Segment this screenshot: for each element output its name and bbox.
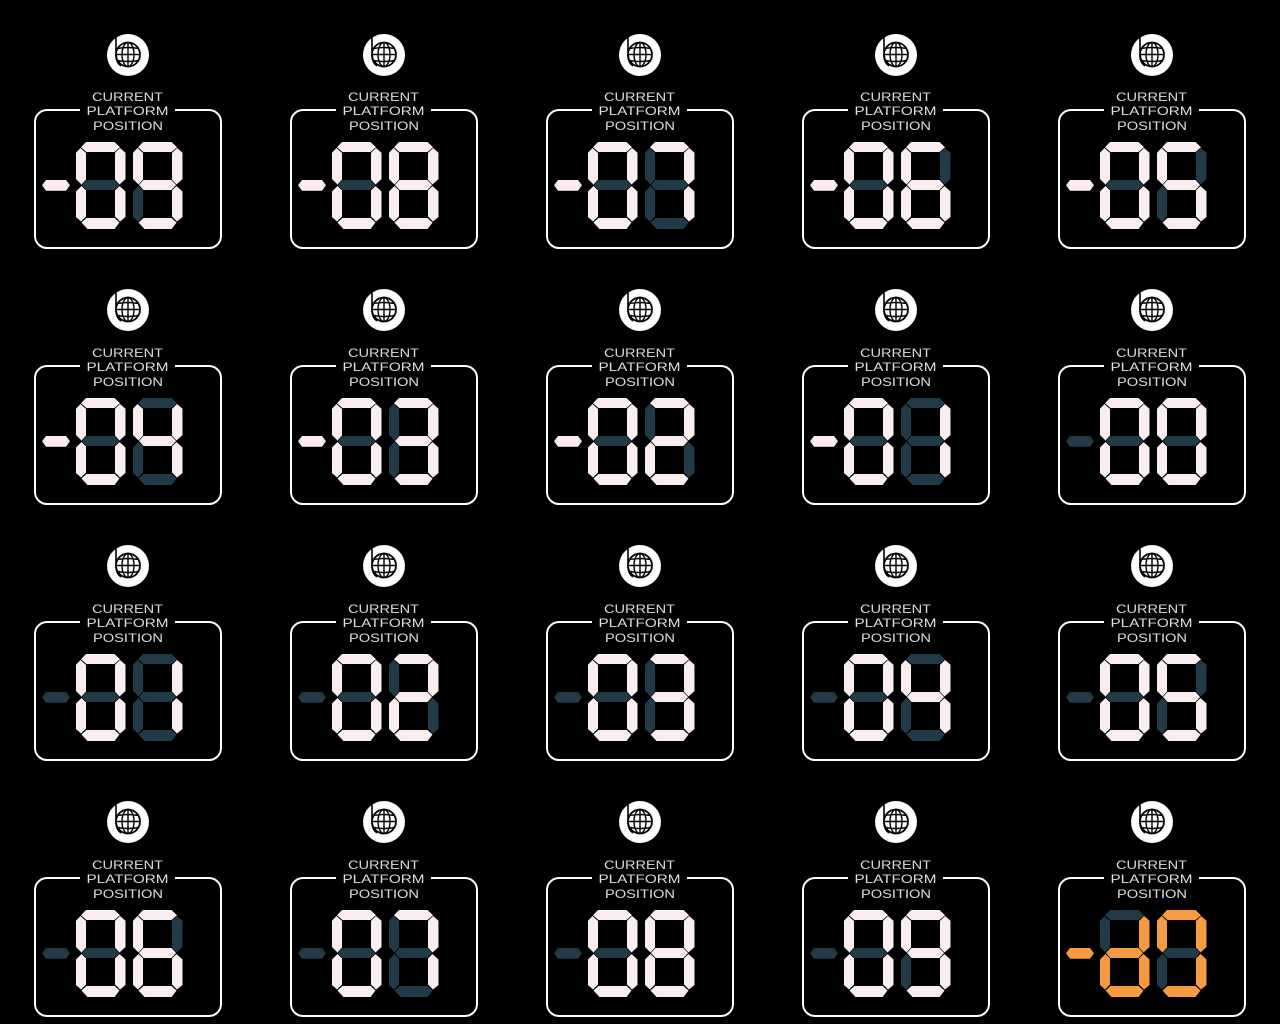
readout: 07 xyxy=(298,910,438,997)
heading: PLATFORM xyxy=(854,360,936,374)
panel: position 05 xyxy=(1059,545,1245,760)
frame xyxy=(547,878,733,1016)
icon: globe logo xyxy=(619,801,661,843)
heading: CURRENT xyxy=(1116,90,1187,104)
icon: globe logo xyxy=(363,801,405,843)
heading: PLATFORM xyxy=(1110,360,1192,374)
readout: 00 xyxy=(1066,398,1206,485)
heading: POSITION xyxy=(93,375,163,389)
icon: globe logo xyxy=(1131,801,1173,843)
heading: CURRENT xyxy=(860,346,931,360)
heading: POSITION xyxy=(605,887,675,901)
heading: POSITION xyxy=(605,631,675,645)
icon: globe logo xyxy=(107,34,149,76)
heading: PLATFORM xyxy=(598,104,680,118)
heading xyxy=(86,602,168,645)
readout: -03 xyxy=(298,398,438,485)
frame xyxy=(1059,366,1245,504)
heading: POSITION xyxy=(1117,631,1187,645)
heading: PLATFORM xyxy=(598,616,680,630)
frame xyxy=(291,110,477,248)
icon: globe logo xyxy=(363,34,405,76)
icon: globe logo xyxy=(1131,289,1173,331)
heading: CURRENT xyxy=(348,858,419,872)
heading: CURRENT xyxy=(348,90,419,104)
readout: 05 xyxy=(1066,654,1206,741)
readout: orange xyxy=(1066,910,1206,997)
frame xyxy=(547,110,733,248)
frame xyxy=(1059,878,1245,1016)
panel: position 04 xyxy=(803,545,989,760)
heading: CURRENT xyxy=(92,346,163,360)
heading: CURRENT xyxy=(604,858,675,872)
frame xyxy=(803,622,989,760)
heading: PLATFORM xyxy=(86,616,168,630)
heading: PLATFORM xyxy=(342,360,424,374)
heading xyxy=(854,90,936,133)
heading: POSITION xyxy=(1117,375,1187,389)
icon: globe logo xyxy=(619,289,661,331)
icon: globe logo xyxy=(1131,34,1173,76)
frame xyxy=(803,366,989,504)
heading xyxy=(342,90,424,133)
heading xyxy=(1110,602,1192,645)
icon: globe logo xyxy=(107,801,149,843)
frame xyxy=(547,366,733,504)
heading xyxy=(342,346,424,389)
readout: -02 xyxy=(554,398,694,485)
frame xyxy=(291,878,477,1016)
heading: CURRENT xyxy=(92,602,163,616)
heading: POSITION xyxy=(861,887,931,901)
heading: POSITION xyxy=(93,631,163,645)
readout: 04 xyxy=(810,654,950,741)
heading: POSITION xyxy=(861,631,931,645)
icon: globe logo xyxy=(875,545,917,587)
frame xyxy=(1059,110,1245,248)
readout: -05 xyxy=(1066,142,1206,229)
icon: globe logo xyxy=(363,545,405,587)
heading: POSITION xyxy=(349,119,419,133)
frame xyxy=(803,878,989,1016)
panel: position -03 xyxy=(291,289,477,504)
panel: orange alert readout xyxy=(1059,801,1245,1016)
heading: CURRENT xyxy=(1116,346,1187,360)
readout: -01 xyxy=(810,398,950,485)
readout: 06 xyxy=(42,910,182,997)
heading xyxy=(598,858,680,901)
heading xyxy=(1110,858,1192,901)
panel: position -06 xyxy=(803,34,989,248)
heading: CURRENT xyxy=(860,858,931,872)
heading xyxy=(1110,90,1192,133)
icon: globe logo xyxy=(875,801,917,843)
heading: POSITION xyxy=(861,119,931,133)
heading: CURRENT xyxy=(92,90,163,104)
icon: globe logo xyxy=(619,545,661,587)
heading: CURRENT xyxy=(604,346,675,360)
heading: CURRENT xyxy=(860,602,931,616)
heading xyxy=(598,602,680,645)
icon: globe logo xyxy=(619,34,661,76)
frame xyxy=(291,366,477,504)
heading: CURRENT xyxy=(348,346,419,360)
readout: -07 xyxy=(554,142,694,229)
frame xyxy=(291,622,477,760)
heading xyxy=(598,90,680,133)
heading: CURRENT xyxy=(604,90,675,104)
panel: position 01 xyxy=(35,545,221,760)
heading xyxy=(598,346,680,389)
frame xyxy=(35,110,221,248)
icon: globe logo xyxy=(107,289,149,331)
panel: position -02 xyxy=(547,289,733,504)
heading: POSITION xyxy=(349,887,419,901)
panel: position 03 xyxy=(547,545,733,760)
readout: 03 xyxy=(554,654,694,741)
heading: CURRENT xyxy=(1116,858,1187,872)
readout: -09 xyxy=(42,142,182,229)
heading: POSITION xyxy=(349,631,419,645)
readout: -08 xyxy=(298,142,438,229)
heading: POSITION xyxy=(605,375,675,389)
frame xyxy=(35,366,221,504)
readout: -04 xyxy=(42,398,182,485)
heading: CURRENT xyxy=(604,602,675,616)
panel: position -07 xyxy=(547,34,733,248)
panel: position -09 xyxy=(35,34,221,248)
heading xyxy=(1110,346,1192,389)
panel: position 09 xyxy=(803,801,989,1016)
heading: CURRENT xyxy=(860,90,931,104)
readout: 08 xyxy=(554,910,694,997)
heading xyxy=(854,858,936,901)
icon: globe logo xyxy=(875,289,917,331)
panel: position 07 xyxy=(291,801,477,1016)
panel: position -08 xyxy=(291,34,477,248)
heading: POSITION xyxy=(605,119,675,133)
icon: globe logo xyxy=(363,289,405,331)
icon: globe logo xyxy=(107,545,149,587)
heading: POSITION xyxy=(861,375,931,389)
heading: PLATFORM xyxy=(854,104,936,118)
frame xyxy=(35,622,221,760)
heading: PLATFORM xyxy=(86,872,168,886)
heading: PLATFORM xyxy=(86,360,168,374)
panel: position 00 xyxy=(1059,289,1245,504)
heading xyxy=(854,602,936,645)
panel: position -05 xyxy=(1059,34,1245,248)
heading xyxy=(854,346,936,389)
heading: POSITION xyxy=(349,375,419,389)
frame xyxy=(803,110,989,248)
heading: CURRENT xyxy=(92,858,163,872)
readout: 01 xyxy=(42,654,182,741)
readout: -06 xyxy=(810,142,950,229)
heading: CURRENT xyxy=(1116,602,1187,616)
heading xyxy=(342,602,424,645)
heading xyxy=(342,858,424,901)
panel: position 06 xyxy=(35,801,221,1016)
heading: PLATFORM xyxy=(86,104,168,118)
heading: POSITION xyxy=(1117,119,1187,133)
heading: PLATFORM xyxy=(1110,616,1192,630)
heading: PLATFORM xyxy=(854,872,936,886)
panel: position -04 xyxy=(35,289,221,504)
heading: PLATFORM xyxy=(598,360,680,374)
frame xyxy=(35,878,221,1016)
heading: PLATFORM xyxy=(1110,104,1192,118)
panel: position -01 xyxy=(803,289,989,504)
heading: PLATFORM xyxy=(342,104,424,118)
heading xyxy=(86,346,168,389)
icon: globe logo xyxy=(1131,545,1173,587)
heading xyxy=(86,90,168,133)
heading: POSITION xyxy=(93,887,163,901)
heading xyxy=(86,858,168,901)
frame xyxy=(1059,622,1245,760)
heading: CURRENT xyxy=(348,602,419,616)
icon: globe logo xyxy=(875,34,917,76)
panel: position 02 xyxy=(291,545,477,760)
readout: 02 xyxy=(298,654,438,741)
heading: PLATFORM xyxy=(598,872,680,886)
heading: PLATFORM xyxy=(342,616,424,630)
frame xyxy=(547,622,733,760)
readout: 09 xyxy=(810,910,950,997)
heading: POSITION xyxy=(93,119,163,133)
heading: PLATFORM xyxy=(854,616,936,630)
heading: PLATFORM xyxy=(342,872,424,886)
heading: POSITION xyxy=(1117,887,1187,901)
panel: position 08 xyxy=(547,801,733,1016)
heading: PLATFORM xyxy=(1110,872,1192,886)
